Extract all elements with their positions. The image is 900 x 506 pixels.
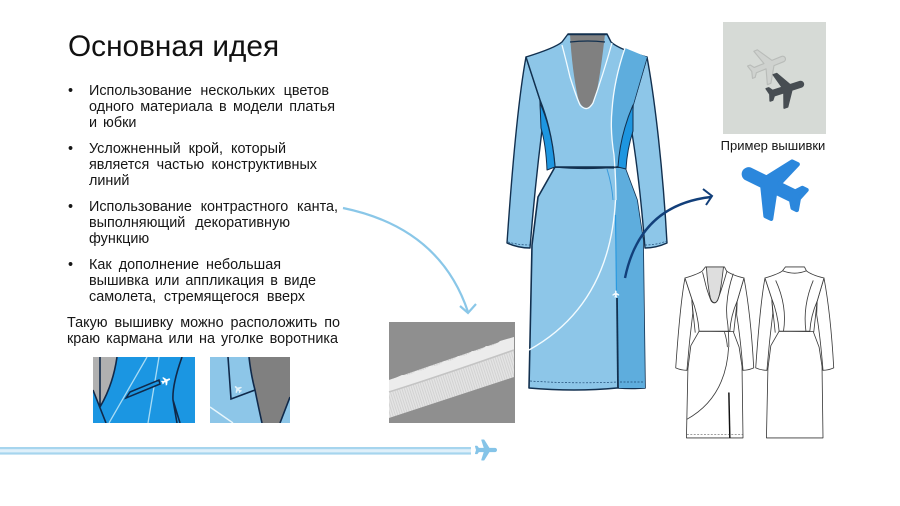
side panels [540,103,555,170]
thumbnail: pocket with airplane embroidery [93,357,195,423]
waist seam [555,167,618,168]
icon: blue embroidered airplane [731,145,815,227]
bodice [526,34,647,167]
neckline [570,34,605,108]
bullet 2: • [68,141,73,157]
photo: contrast piping trim [389,322,515,423]
text block: embroidery placement: краю кармана или на уголке воротника [67,331,338,347]
bullet 4: вышивка или аппликация в виде [89,273,316,289]
caption: embroidery sample: Пример вышивки [721,138,825,153]
dress illustration: colour front view [507,34,667,390]
photo: embroidery sample [723,22,826,134]
technical flat: back view [756,267,834,438]
bullet 4: Как дополнение небольшая [89,257,281,273]
bullet 4 [68,257,316,305]
bullet 1 [68,83,335,131]
bullet 1: • [68,83,73,99]
bullet 3: выполняющий декоративную [89,215,290,231]
bullet 4: самолета, стремящегося вверх [89,289,305,305]
skirt [529,167,645,390]
bullet 2: является частью конструктивных [89,157,317,173]
bullet 1: одного материала в модели платья [89,99,335,115]
title: Основная идея [68,30,279,63]
bullet 2 [68,141,317,189]
placket seam [616,215,617,294]
bullet 3: • [68,199,73,215]
right sleeve [632,57,667,248]
bullet 4: • [68,257,73,273]
slit [617,298,618,388]
bullet 1: и юбки [89,115,136,131]
small airplane embroidery [613,291,619,297]
bullet list: main ideas [68,83,338,305]
text block: embroidery placement: Такую вышивку можно расположить по [67,315,340,331]
hem and cuff stitching [508,241,667,383]
bullet 3 [68,199,338,247]
technical flat: front view [676,267,754,438]
arrow: piping callout [343,208,476,313]
thumbnail: collar corner with airplane embroidery [210,357,290,423]
bullet 1: Использование нескольких цветов [89,83,329,99]
bullet 2: Усложненный крой, который [89,141,286,157]
left sleeve [507,57,542,248]
text block: embroidery placement [67,315,340,347]
bodice right panel [611,48,647,166]
contrail line with airplane [0,440,496,460]
white piping lines [562,43,612,109]
bullet 3: функцию [89,231,149,247]
bullet 2: линий [89,173,129,189]
bullet 3: Использование контрастного канта, [89,199,338,215]
skirt right panel [615,168,645,388]
arrow: embroidery callout [625,189,712,278]
